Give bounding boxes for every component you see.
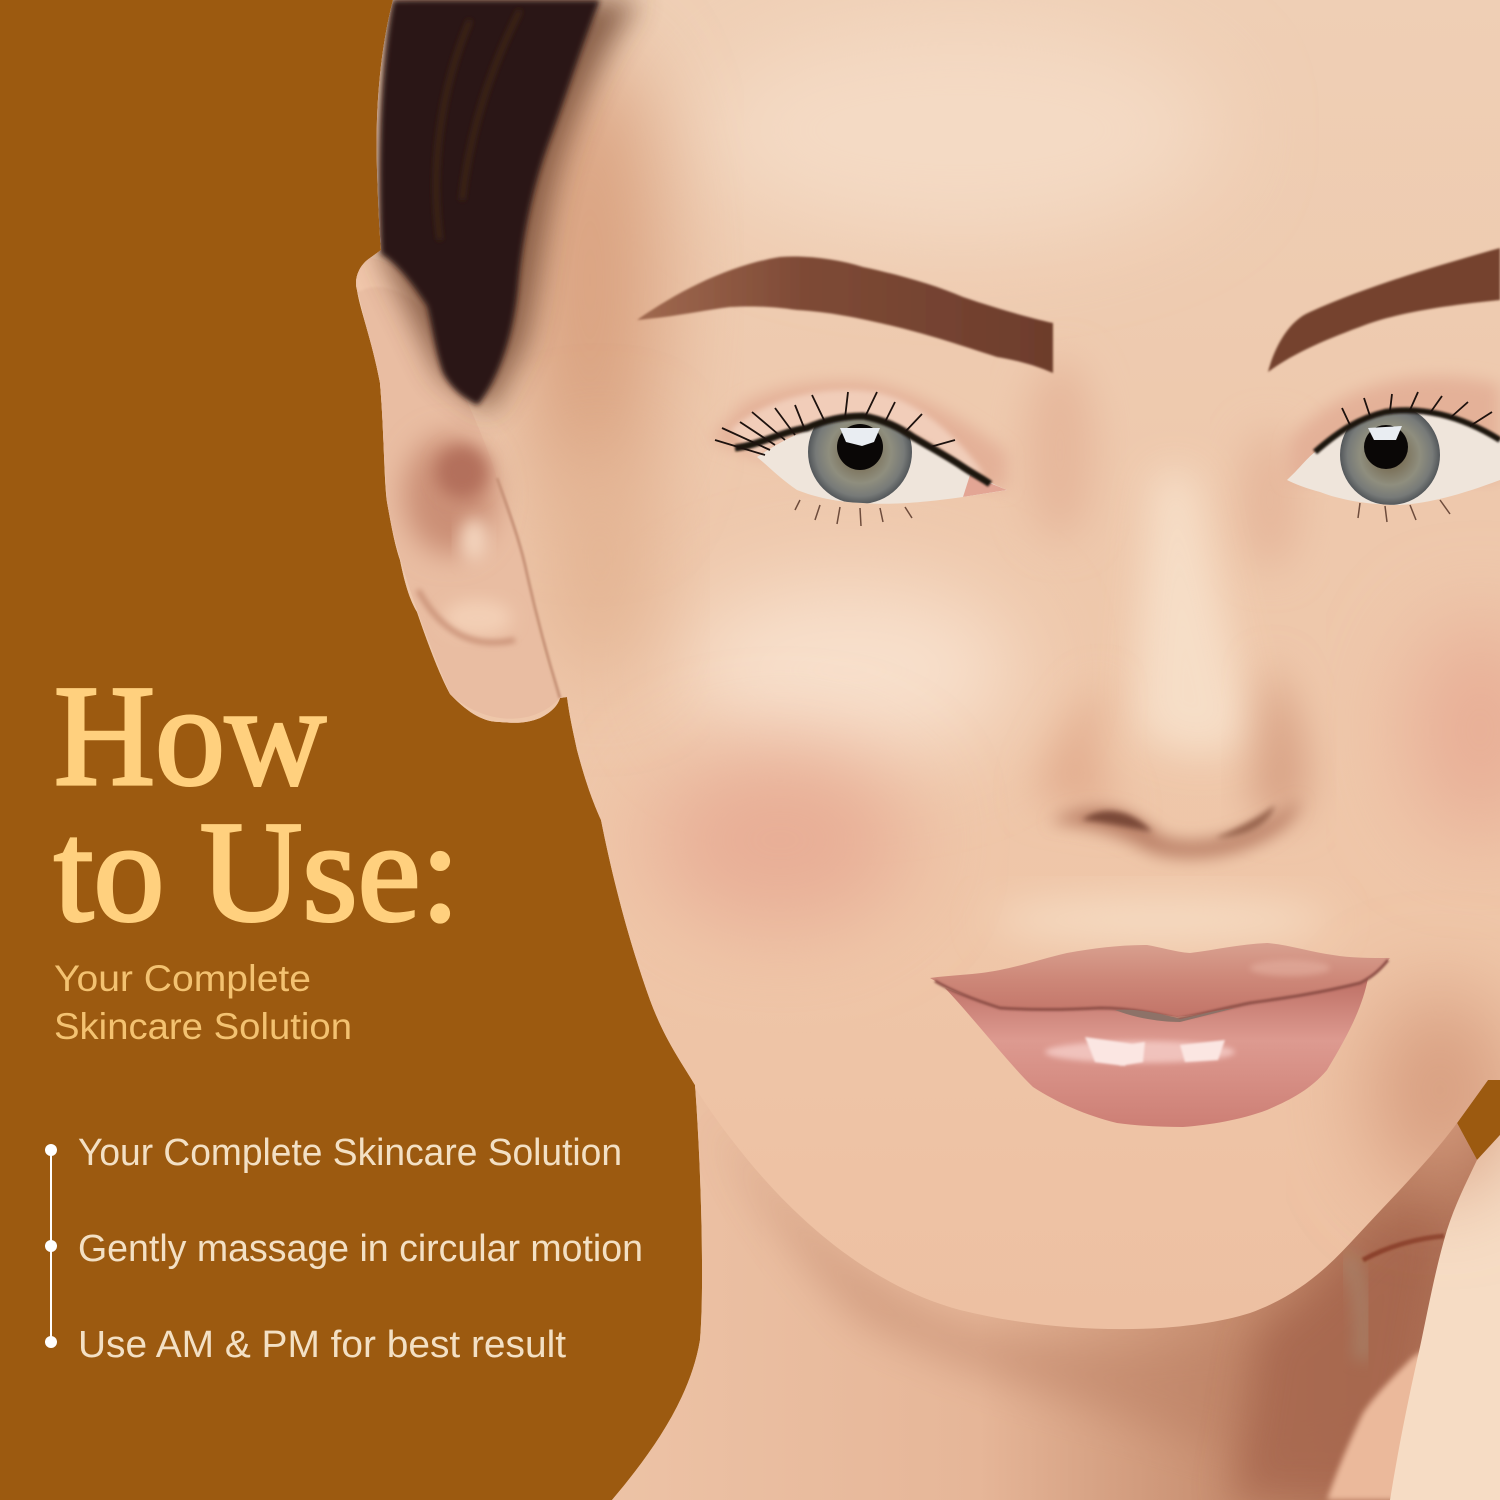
face shading [520,20,1500,1190]
base skin [340,0,1500,1500]
hair [379,0,640,412]
title: How [54,657,326,816]
neck [600,1080,1500,1500]
step list: Gently massage in circular motion [78,1228,643,1270]
left eye [710,382,1007,526]
right eye [1287,377,1500,522]
ear [356,258,560,719]
lips [930,943,1390,1127]
subtitle: Your Complete [54,958,311,999]
nose [1035,470,1307,858]
right eyebrow [1268,248,1500,372]
portrait of woman [340,0,1500,1500]
step list [78,1132,643,1366]
title [54,657,460,952]
step list: Your Complete Skincare Solution [78,1132,622,1174]
timeline connector [45,1144,57,1348]
step list: Use AM & PM for best result [78,1324,566,1366]
neck shadow under chin [752,1174,1445,1500]
subtitle [54,958,352,1047]
left eyebrow [637,257,1053,373]
face skin [340,0,1500,1329]
title: to Use: [54,793,460,952]
fingers of hand [1327,1135,1500,1500]
subtitle: Skincare Solution [54,1006,352,1047]
